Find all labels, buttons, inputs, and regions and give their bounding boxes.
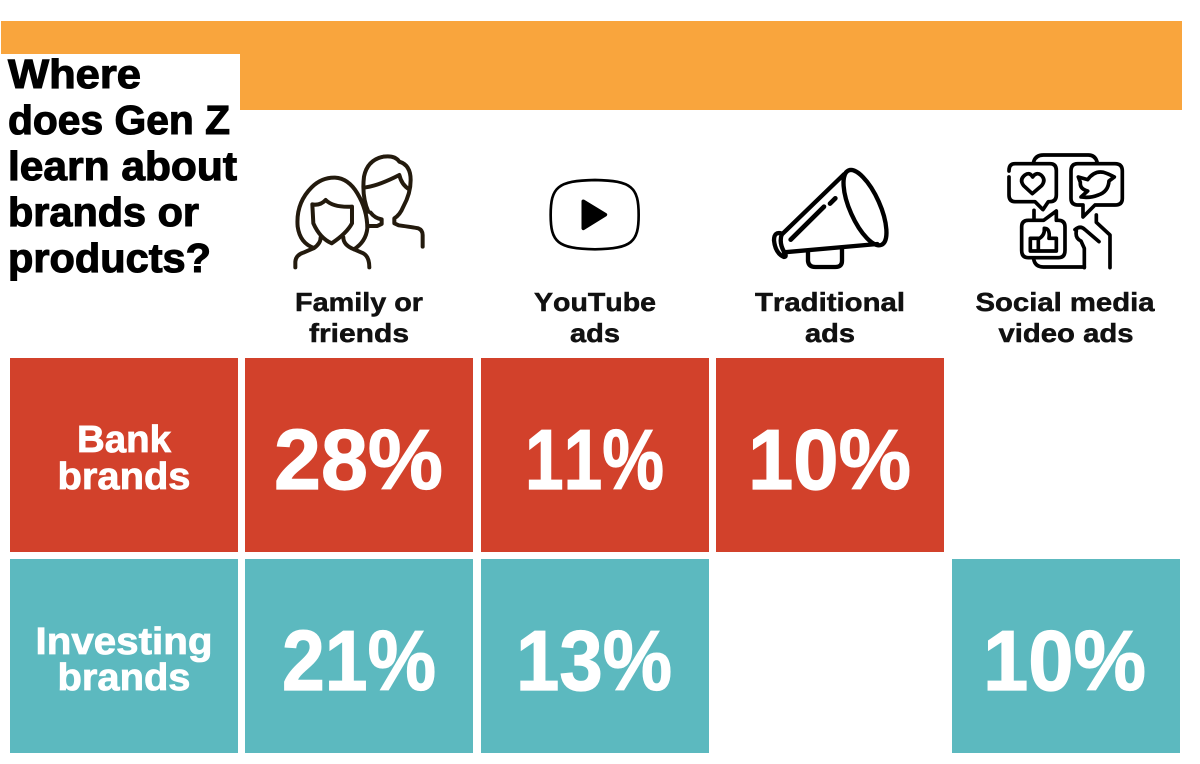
bank YouTube value: 11% [525, 413, 664, 508]
bank traditional value [716, 358, 944, 552]
column labels: ads [805, 318, 855, 348]
column labels: Social media [976, 287, 1155, 317]
investing brands label cell: brands [58, 657, 190, 699]
title: does Gen Z [8, 97, 230, 143]
column labels: YouTube [534, 287, 656, 317]
bank brands label cell: brands [58, 456, 190, 498]
investing social media value [952, 559, 1180, 753]
title: learn about [8, 143, 237, 189]
bank family or friends value: 28% [274, 413, 443, 508]
investing family or friends value: 21% [282, 614, 436, 709]
title: brands or [8, 189, 199, 235]
bank brands row [10, 358, 944, 552]
icon: family or friends [295, 156, 423, 267]
title: products? [8, 235, 211, 281]
bank YouTube value [481, 358, 709, 552]
column labels: video ads [998, 318, 1134, 348]
title [8, 51, 237, 281]
bank family or friends value [245, 358, 473, 552]
icon: traditional ads megaphone [774, 164, 895, 267]
column labels: ads [570, 318, 620, 348]
investing social media value: 10% [983, 614, 1146, 709]
icon: YouTube ads [551, 180, 639, 249]
orange header band [1, 21, 1182, 110]
column labels: friends [309, 318, 409, 348]
investing brands label cell [10, 559, 238, 753]
bank brands label cell: Bank [77, 419, 172, 461]
investing brands row [10, 559, 1180, 753]
bank brands label cell [10, 358, 238, 552]
investing YouTube value: 13% [516, 614, 672, 709]
title: Where [8, 51, 141, 97]
investing brands label cell: Investing [36, 621, 212, 663]
column labels: Family or [295, 287, 423, 317]
column labels [295, 287, 1155, 348]
investing family or friends value [245, 559, 473, 753]
icon: social media video ads [1009, 155, 1122, 268]
bank traditional value: 10% [748, 413, 911, 508]
investing YouTube value [481, 559, 709, 753]
column labels: Traditional [755, 287, 905, 317]
